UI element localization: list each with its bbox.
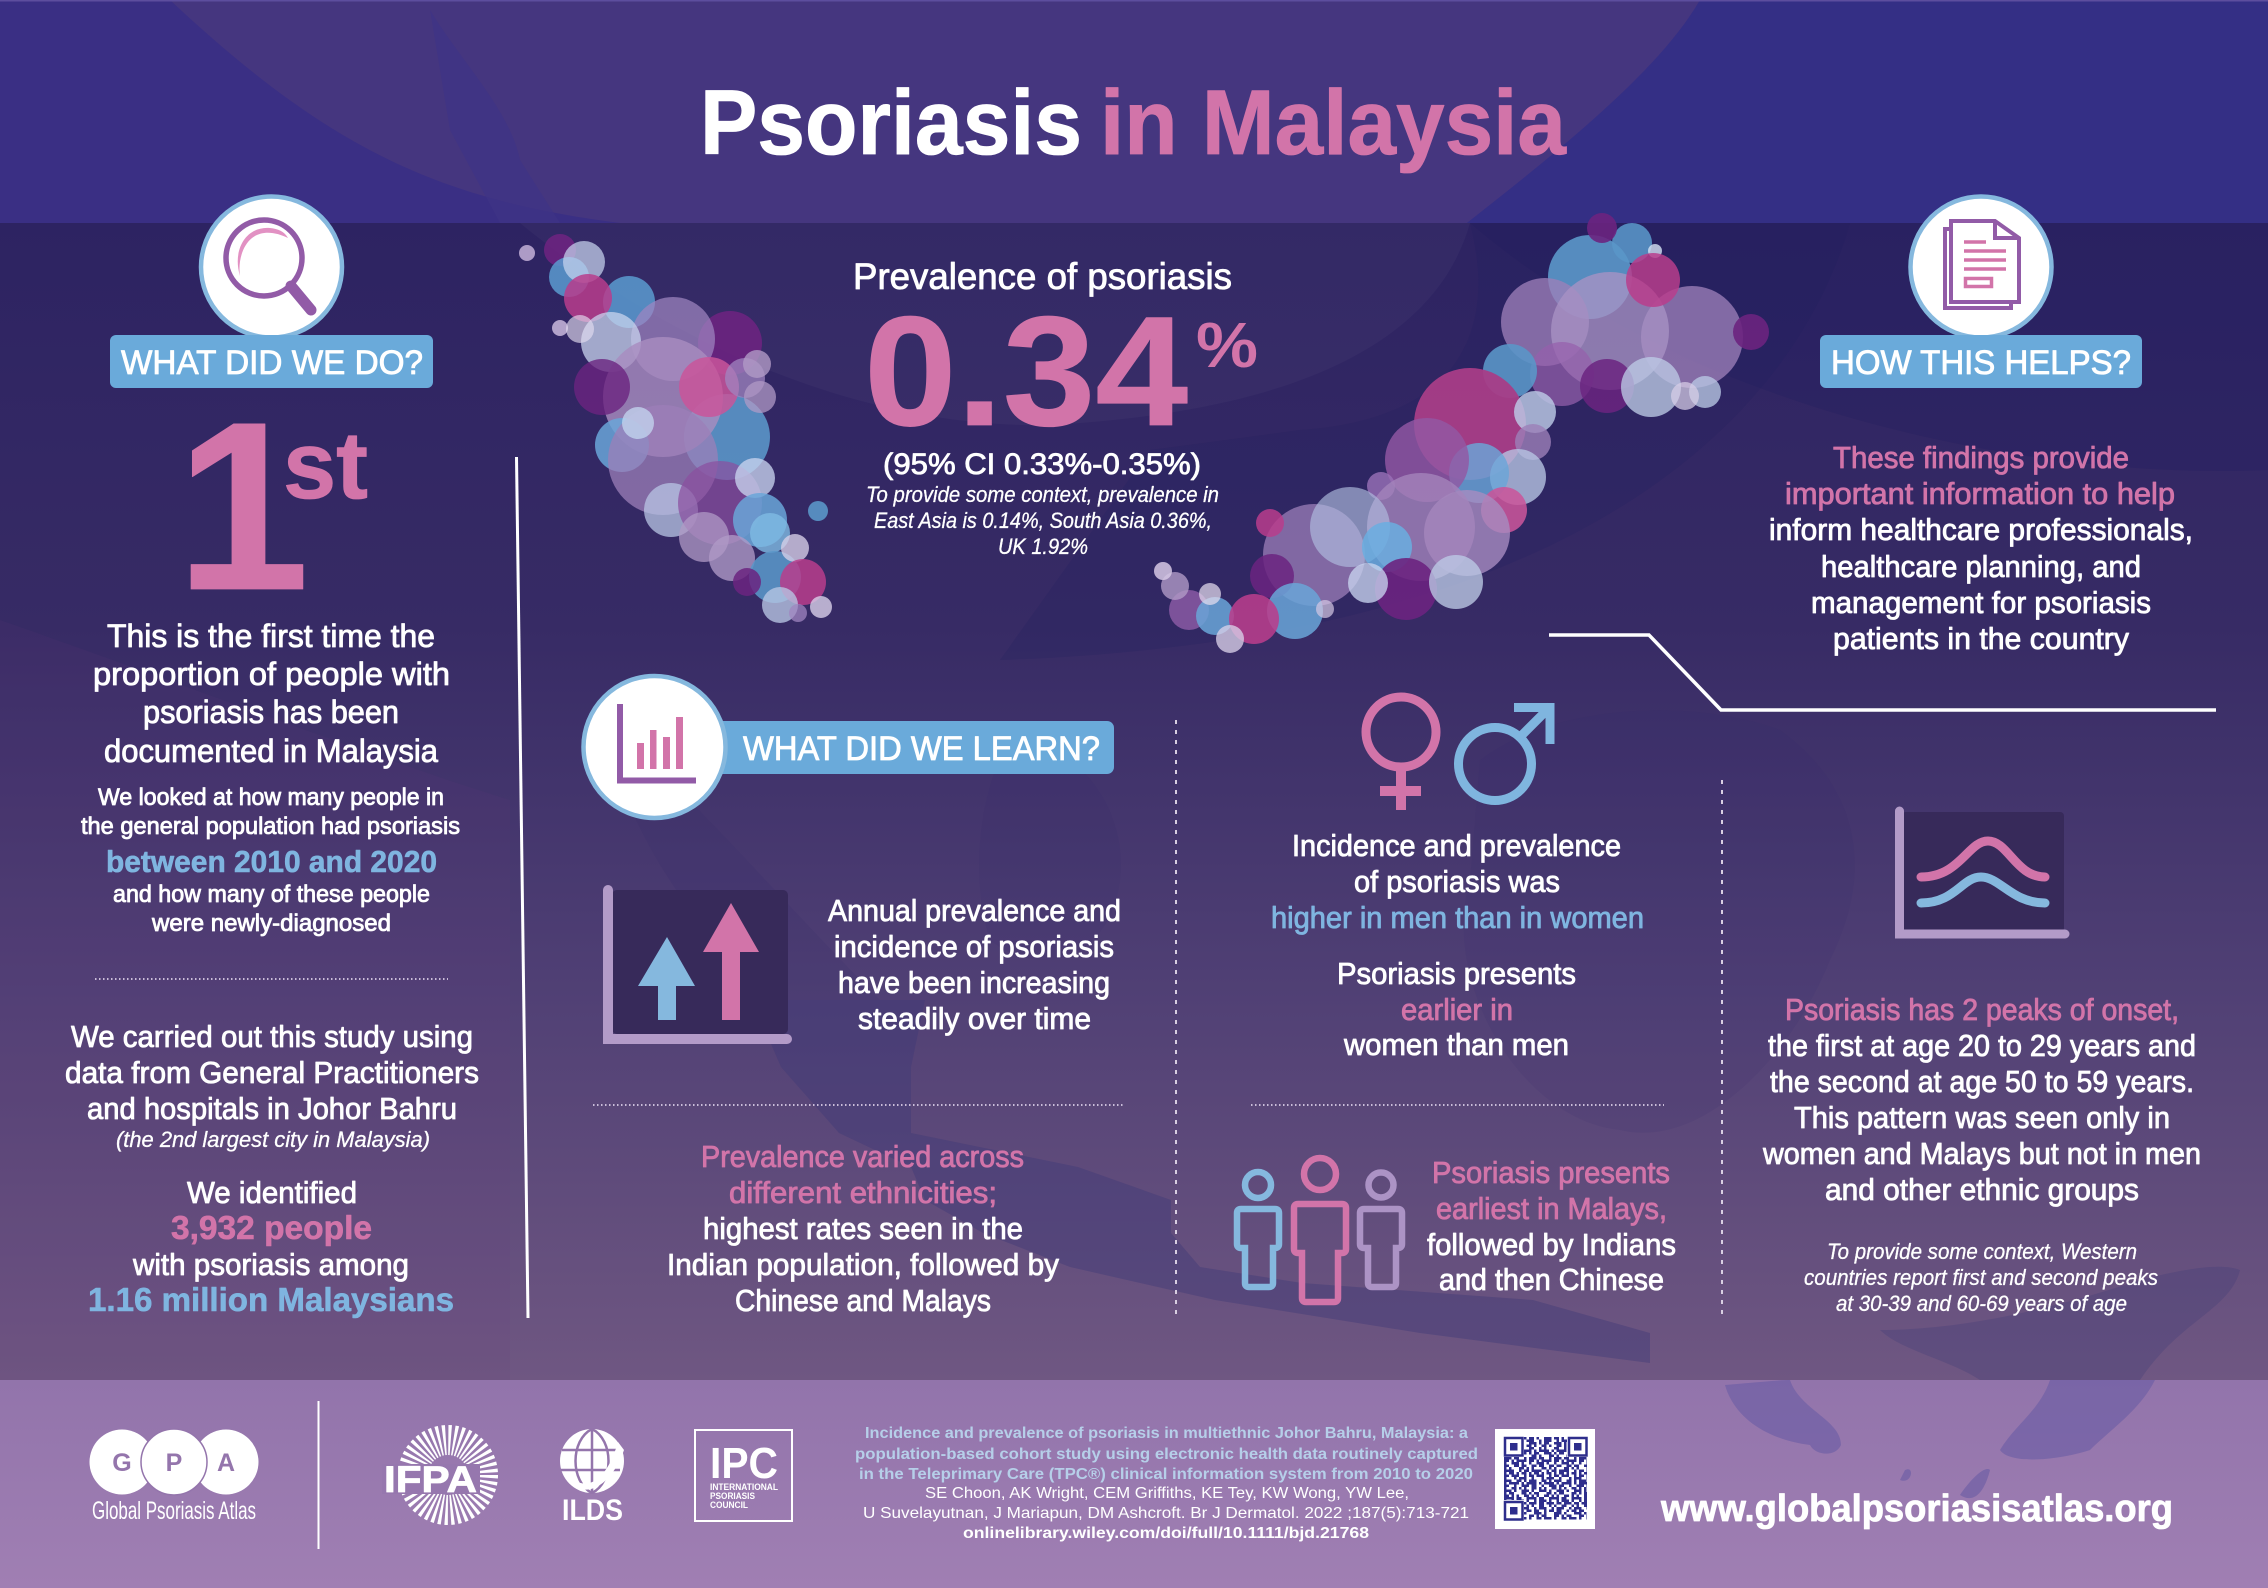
- text: findings: healthcare planning, and: [1821, 549, 2141, 584]
- big number 0.34%: %: [1196, 309, 1258, 381]
- text: ethnicities: different ethnicities;: [729, 1175, 997, 1210]
- text: annual prevalence: incidence of psoriasis: [834, 929, 1114, 964]
- text: western context: at 30-39 and 60-69 years of age: [1836, 1291, 2127, 1316]
- QR code: [1495, 1429, 1595, 1529]
- text: ethnic onset: earliest in Malays,: [1436, 1191, 1667, 1226]
- text: citation: Incidence and prevalence of psoriasis in multiethnic Johor Bahru, Malaysia: a: [865, 1425, 1468, 1442]
- text: study period: were newly-diagnosed: [151, 910, 391, 937]
- logo: Global Psoriasis Atlas: Global Psoriasis Atlas: [92, 1497, 256, 1525]
- text: prevalence context: East Asia is 0.14%, South Asia 0.36%,: [874, 508, 1212, 533]
- text: ethnicities: [667, 1139, 1059, 1318]
- text: men versus women: women than men: [1343, 1027, 1569, 1062]
- title: Psoriasis: [700, 72, 1082, 174]
- text: findings: inform healthcare professionals,: [1769, 512, 2193, 547]
- text: ethnicities: Prevalence varied across: [701, 1139, 1024, 1174]
- text: prevalence context: UK 1.92%: [998, 534, 1088, 559]
- footer: [90, 1401, 2173, 1549]
- text: two peaks: This pattern was seen only in: [1794, 1100, 2170, 1135]
- badge: what did we do: WHAT DID WE DO?: [121, 344, 423, 382]
- text: ethnicities: highest rates seen in the: [703, 1211, 1023, 1246]
- text: prevalence context: [866, 482, 1219, 559]
- text: findings: These findings provide: [1833, 440, 2129, 475]
- text: two peaks: the second at age 50 to 59 years.: [1770, 1064, 2194, 1099]
- text: study period: and how many of these people: [113, 881, 430, 908]
- text: identified people: We identified: [187, 1175, 357, 1210]
- text: ethnic onset: followed by Indians: [1427, 1227, 1676, 1262]
- logo: IPC: PSORIASIS: [710, 1491, 755, 1502]
- text: ethnic onset: [1427, 1155, 1676, 1297]
- text: ethnic onset: Psoriasis presents: [1432, 1155, 1670, 1190]
- text: first time: This is the first time the: [107, 618, 435, 654]
- text: findings: [1769, 440, 2193, 656]
- text: men versus women: Incidence and prevalence: [1292, 828, 1621, 863]
- text: men versus women: earlier in: [1401, 992, 1513, 1027]
- map shapes: [752, 1000, 1650, 1363]
- map: peninsular Malaysia bubbles: [519, 234, 832, 623]
- text: first time: proportion of people with: [93, 656, 450, 692]
- title: [700, 72, 1567, 174]
- text: data sources: We carried out this study using: [71, 1019, 473, 1054]
- text: annual prevalence: [828, 893, 1121, 1036]
- text: citation: onlinelibrary.wiley.com/doi/full/10.1111/bjd.21768: [963, 1525, 1369, 1542]
- text: data sources: [65, 1019, 479, 1152]
- text: two peaks: [1762, 992, 2201, 1207]
- text: citation: population-based cohort study using electronic health data routinely captured: [855, 1446, 1478, 1463]
- big number 1st: [176, 372, 368, 640]
- logo: IPC: INTERNATIONAL: [710, 1482, 778, 1493]
- badge: how this helps: [1820, 335, 2142, 388]
- text: study period: between 2010 and 2020: [106, 844, 437, 879]
- text: citation: [855, 1425, 1478, 1542]
- text: citation: in the Teleprimary Care (TPC®) clinical information system from 2010 to 2020: [859, 1466, 1473, 1483]
- text: first time: [93, 618, 450, 769]
- badge: what did we learn: WHAT DID WE LEARN?: [743, 730, 1100, 768]
- badge: what did we do: [110, 335, 433, 388]
- text: first time: documented in Malaysia: [104, 733, 438, 769]
- text: ethnicities: Indian population, followed by: [667, 1247, 1059, 1282]
- logo: Global Psoriasis Atlas: [90, 1429, 258, 1525]
- icon: magnifying glass: [201, 196, 342, 338]
- icon: documents: [1910, 196, 2052, 338]
- panel: prevalence: [853, 256, 1258, 559]
- big number 1st: 1: [176, 372, 309, 640]
- text: western context: [1804, 1239, 2158, 1316]
- text: two peaks: and other ethnic groups: [1825, 1172, 2139, 1207]
- text: findings: patients in the country: [1833, 621, 2129, 656]
- logo: IPC: COUNCIL: [710, 1500, 748, 1511]
- text: identified people: 3,932 people: [171, 1209, 372, 1246]
- text: data sources: and hospitals in Johor Bahru: [87, 1091, 457, 1126]
- text: annual prevalence: have been increasing: [838, 965, 1110, 1000]
- text: annual prevalence: Annual prevalence and: [828, 893, 1121, 928]
- logo: ILDS: ILDS: [562, 1494, 623, 1527]
- text: prevalence context: To provide some context, prevalence in: [866, 482, 1219, 507]
- icon: rising arrows chart: [608, 890, 788, 1039]
- text: study period: We looked at how many people in: [98, 784, 444, 811]
- badge: how this helps: HOW THIS HELPS?: [1831, 344, 2131, 382]
- text: data sources: (the 2nd largest city in Malaysia): [116, 1127, 430, 1152]
- text: identified people: with psoriasis among: [132, 1247, 409, 1282]
- big number 0.34%: 0.34: [864, 285, 1188, 459]
- text: findings: management for psoriasis: [1811, 585, 2151, 620]
- big number 1st: st: [283, 412, 368, 519]
- icon: three people: [1237, 1158, 1402, 1302]
- text: men versus women: of psoriasis was: [1354, 864, 1560, 899]
- icon: peak curves chart: [1900, 811, 2065, 934]
- logo: IPC: IPC: [710, 1439, 778, 1488]
- text: citation: U Suvelayutnan, J Mariapun, DM Ashcroft. Br J Dermatol. 2022 ;187(5):713-721: [863, 1505, 1469, 1522]
- text: western context: To provide some context, Western: [1827, 1239, 2137, 1264]
- website url: www.globalpsoriasisatlas.org: [1660, 1488, 2173, 1530]
- panel: peaks of onset: [1762, 811, 2201, 1316]
- panel: gender and ethnic onset: [1237, 697, 1676, 1302]
- logo: IFPA: IFPA: [384, 1459, 477, 1500]
- logo: ILDS: [560, 1429, 624, 1527]
- text: annual prevalence: steadily over time: [858, 1001, 1091, 1036]
- text: study period: the general population had psoriasis: [81, 813, 460, 840]
- text: ethnicities: Chinese and Malays: [735, 1283, 991, 1318]
- text: two peaks: Psoriasis has 2 peaks of onset,: [1785, 992, 2179, 1027]
- text: study period: [81, 784, 460, 937]
- text: first time: psoriasis has been: [143, 694, 399, 730]
- text: data sources: data from General Practitioners: [65, 1055, 479, 1090]
- panel: what did we do: [65, 196, 479, 1318]
- text: identified people: [88, 1175, 454, 1318]
- text: western context: countries report first and second peaks: [1804, 1265, 2158, 1290]
- panel: what did we learn: [584, 676, 1125, 1318]
- heading: prevalence of psoriasis: Prevalence of psoriasis: [853, 256, 1232, 297]
- text: identified people: 1.16 million Malaysians: [88, 1281, 454, 1318]
- logo: Global Psoriasis Atlas: A: [217, 1449, 235, 1477]
- text: citation: SE Choon, AK Wright, CEM Griffiths, KE Tey, KW Wong, YW Lee,: [925, 1485, 1409, 1502]
- logo: Global Psoriasis Atlas: P: [166, 1449, 182, 1477]
- text: two peaks: the first at age 20 to 29 years and: [1768, 1028, 2196, 1063]
- icon: bar chart: [584, 676, 726, 818]
- text: ethnic onset: and then Chinese: [1439, 1262, 1664, 1297]
- panel: how this helps: [1769, 196, 2193, 656]
- badge: what did we learn: [700, 721, 1114, 774]
- title: in Malaysia: [1100, 72, 1567, 174]
- logo: IPC: [695, 1430, 792, 1521]
- text: findings: important information to help: [1785, 476, 2175, 511]
- icon: female and male symbols: [1366, 697, 1551, 810]
- text: two peaks: women and Malays but not in men: [1762, 1136, 2201, 1171]
- text: men versus women: Psoriasis presents: [1337, 956, 1576, 991]
- map: East Malaysia bubbles: [1154, 213, 1769, 653]
- text: men versus women: higher in men than in women: [1271, 900, 1644, 935]
- logo: IFPA: [382, 1440, 483, 1510]
- text: confidence interval: (95% CI 0.33%-0.35%): [883, 448, 1201, 481]
- text: men versus women: [1271, 828, 1644, 1062]
- logo: Global Psoriasis Atlas: G: [112, 1449, 132, 1477]
